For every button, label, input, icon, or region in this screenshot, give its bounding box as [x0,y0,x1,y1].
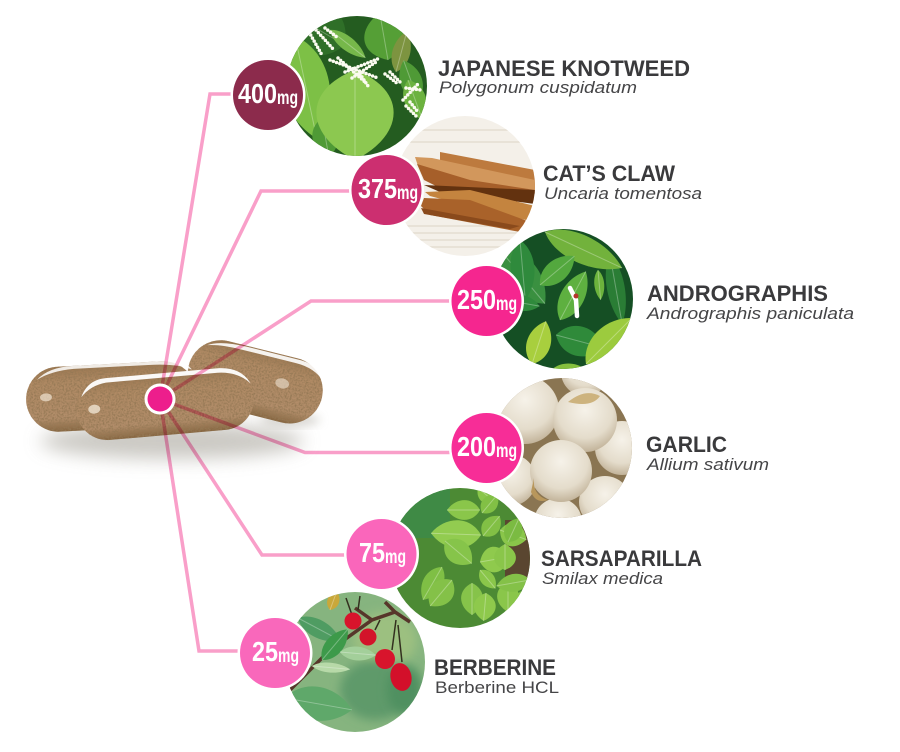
dosage badge: 375mg: 375 [358,173,397,204]
hub dot on capsule [144,384,176,414]
connector lines from capsule to dosages [160,94,451,651]
dosage badge: 200mg [449,410,524,486]
panel: cat's claw [349,116,702,256]
dosage badge: 400mg: 400 [238,78,277,109]
dosage badge: 25mg: 25 [252,636,278,667]
name: JAPANESE KNOTWEED [438,56,690,81]
photo: berberis branch with berries [282,589,425,732]
dosage badge: 400mg: mg [277,88,298,109]
dosage badge: 25mg: mg [278,646,299,667]
dosage badge: 250mg: 250 [457,284,496,315]
dosage badge: 75mg [344,516,419,592]
dosage badge: 200mg: mg [496,441,517,462]
dosage badge: 250mg [449,264,524,338]
photo: andrographis plant [501,229,633,369]
panel: japanese knotweed [230,16,690,156]
dosage badge: 250mg: mg [496,294,517,315]
latin name: Allium sativum [646,455,769,474]
photo: sarsaparilla leaves [396,488,530,628]
dosage badge: 75mg: 75 [359,537,385,568]
name: BERBERINE [434,655,556,680]
capsules photo [24,333,330,459]
latin name: Uncaria tomentosa [544,184,702,203]
panel: berberine [238,589,559,732]
photo: garlic bulbs [501,378,632,518]
panel: sarsaparilla [344,482,702,628]
latin name: Polygonum cuspidatum [439,78,637,97]
dosage badge: 25mg [238,616,312,690]
name: CAT’S CLAW [543,161,675,186]
dosage badge: 375mg [349,152,424,228]
dosage badge: 200mg: 200 [457,431,496,462]
photo: knotweed leaves [290,16,427,156]
latin name: Smilax medica [542,569,663,588]
description: Berberine HCL [435,678,559,697]
panel: garlic [449,378,768,518]
dosage badge: 400mg [230,58,306,132]
dosage badge: 75mg: mg [385,547,406,568]
name: SARSAPARILLA [541,546,702,571]
photo: cat's claw bark [395,116,535,256]
panel: andrographis [449,229,854,369]
name: GARLIC [646,432,727,457]
latin name: Andrographis paniculata [646,304,854,323]
name: ANDROGRAPHIS [647,281,828,306]
dosage badge: 375mg: mg [397,183,418,204]
